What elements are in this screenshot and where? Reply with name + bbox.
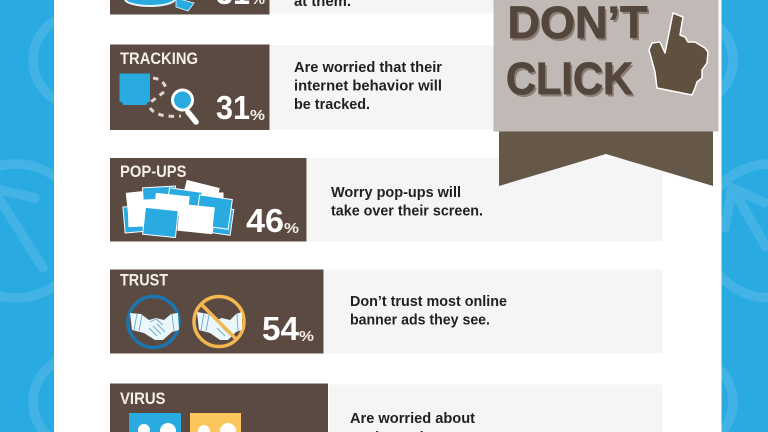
text: trust description: Don’t trust most online	[350, 294, 507, 310]
icon: yellow virus window	[190, 413, 241, 432]
title: don't: DON’T	[510, 0, 650, 50]
sign panel	[494, 0, 718, 132]
text: trust description: banner ads they see.	[350, 312, 490, 328]
row: pop-ups	[110, 158, 662, 242]
ribbon tail	[499, 131, 713, 186]
title: click: CLICK	[508, 56, 635, 106]
heading: trust: TRUST	[120, 272, 168, 290]
row: virus	[110, 384, 662, 432]
icon: handshake in blue ring	[128, 296, 179, 348]
heading: pop-ups: POP-UPS	[120, 163, 186, 181]
heading: tracking: TRACKING	[120, 50, 198, 68]
row: pop-ups: %	[284, 220, 299, 237]
row: tracking: %	[250, 107, 265, 124]
icon: screen and magnifier	[120, 74, 196, 122]
text: tracking description	[294, 60, 442, 113]
icon: partial top item graphic	[125, 0, 194, 11]
percentage: 31%: 31	[216, 89, 250, 126]
banner: don't click	[494, 0, 718, 186]
text: tracking description: internet behavior will	[294, 78, 442, 94]
percentage: 46%: 46	[246, 202, 284, 239]
text: tracking description: Are worried that their	[294, 60, 442, 76]
icon: pointing hand cursor	[649, 13, 708, 95]
icon: handshake crossed out in yellow ring	[194, 296, 244, 346]
text: virus description: Are worried about	[350, 411, 475, 427]
heading: virus: VIRUS	[120, 390, 166, 408]
text: tracking description: be tracked.	[294, 97, 370, 113]
icon: blue virus window	[129, 413, 181, 432]
percentage: 54%: 54	[262, 310, 300, 347]
title: click: CLICK	[506, 53, 633, 104]
row: trust: %	[299, 328, 314, 345]
icon: pile of pop-up windows	[123, 180, 234, 238]
text: pop-ups description	[331, 185, 483, 220]
text: pop-ups description: take over their screen.	[331, 204, 483, 220]
text: trust description	[350, 294, 507, 328]
row: partial top item	[110, 0, 494, 14]
row: tracking	[110, 44, 494, 130]
row: trust	[110, 270, 662, 354]
text: pop-ups description: Worry pop-ups will	[331, 185, 461, 201]
